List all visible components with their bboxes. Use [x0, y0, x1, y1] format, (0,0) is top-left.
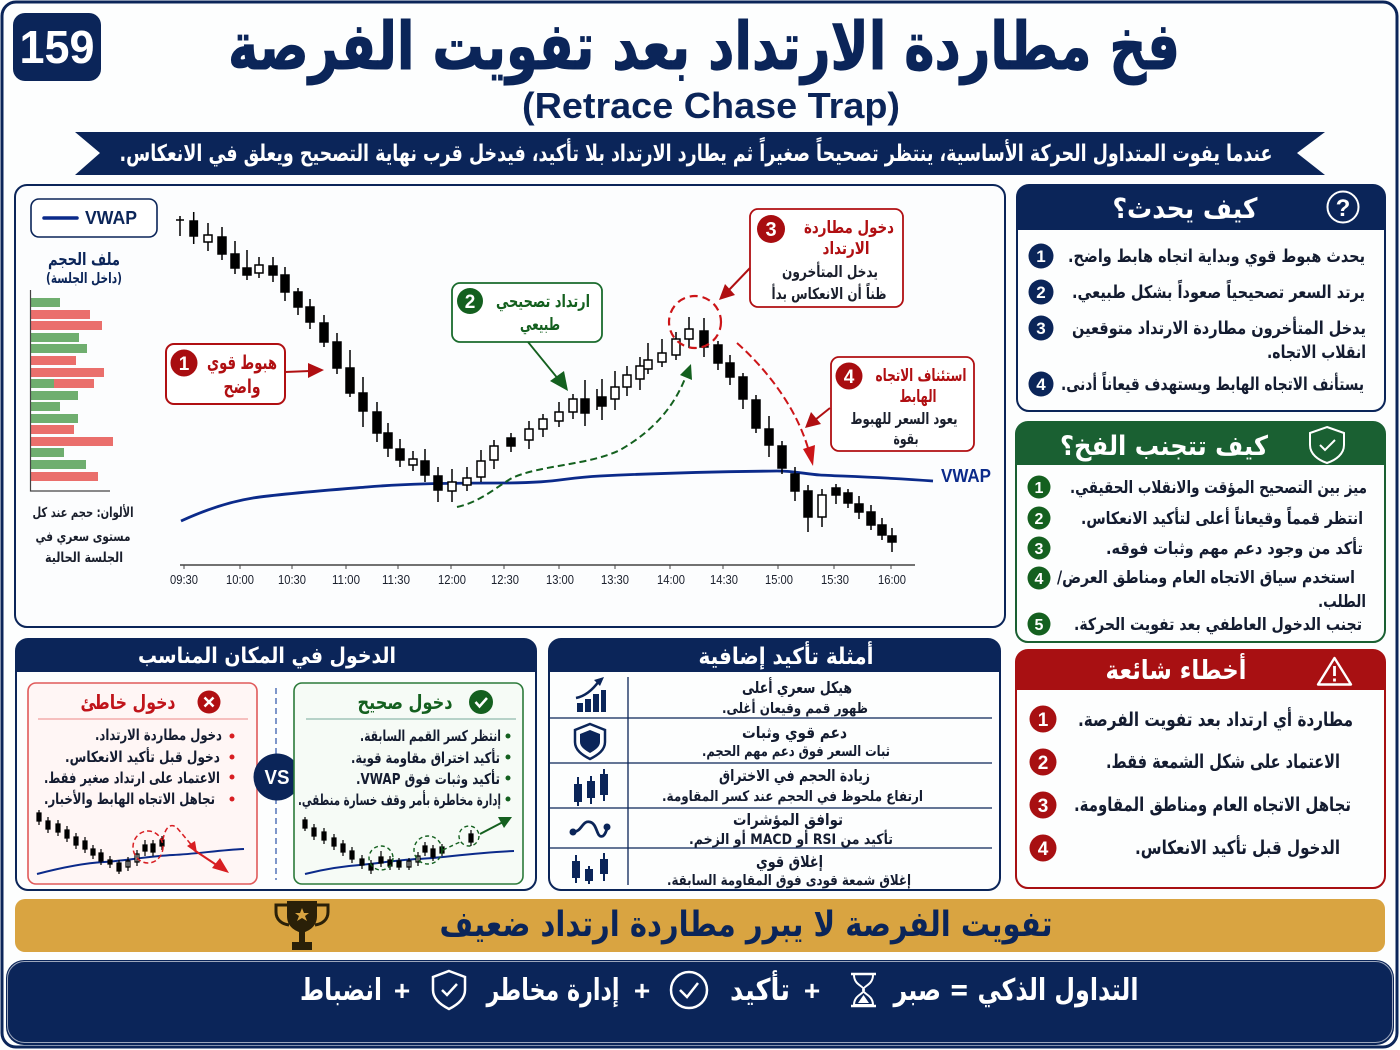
volume profile caption: مستوى سعري في	[36, 529, 130, 545]
volume profile caption: الجلسة الحالية	[45, 550, 123, 566]
red dashed resumption path	[737, 343, 815, 466]
mistakes list: 2	[1038, 753, 1048, 774]
time axis: 15:00	[765, 572, 793, 587]
panel: common mistakes	[1016, 650, 1385, 888]
summary ribbon	[75, 132, 1325, 175]
row 4: indicator agreement: تأكيد من RSI أو MACD أو الزخم.	[689, 830, 893, 848]
mistakes list: 1	[1038, 710, 1049, 731]
time axis: 10:00	[226, 572, 254, 587]
steps: الطلب.	[1318, 592, 1366, 612]
mistakes list	[1030, 706, 1353, 862]
formula: smart trading = patience: التداول الذكي = صبر	[892, 973, 1138, 1008]
callout 4: downtrend resumes: بقوة	[894, 430, 918, 448]
icon: question mark	[1328, 192, 1358, 222]
steps: تأكد من وجود دعم مهم وثبات فوقه.	[1106, 537, 1363, 559]
card: correct entry: دخول صحيح	[358, 690, 452, 714]
row 3: breakout volume	[575, 766, 923, 806]
time axis: 13:30	[601, 572, 629, 587]
callout 3: chase entry: دخول مطاردة	[804, 218, 894, 238]
row 1: higher price structure	[576, 677, 868, 717]
time axis: 12:30	[491, 572, 519, 587]
row 1: higher price structure: ظهور قمم وقيعان أغلى.	[722, 699, 868, 717]
icon: trophy	[276, 901, 328, 950]
card: correct entry: تأكيد اختراق مقاومة قوية.	[351, 748, 500, 767]
row 2: strong support: ثبات السعر فوق دعم مهم الحجم.	[702, 744, 890, 760]
takeaway text: تفويت الفرصة لا يبرر مطاردة ارتداد ضعيف	[440, 905, 1052, 945]
panel: how it happens	[1017, 185, 1385, 411]
VWAP legend	[31, 199, 157, 237]
card: correct entry: انتظر كسر القمم السابقة.	[360, 727, 501, 745]
icon: hourglass	[851, 974, 876, 1006]
heading: كيف يحدث؟	[1112, 192, 1258, 225]
plus sign: +	[804, 975, 820, 1006]
callout 1: strong drop: هبوط قوي	[207, 352, 277, 375]
time axis: 10:30	[278, 572, 306, 587]
volume profile heading: ملف الحجم	[48, 250, 120, 270]
card: correct entry: تأكيد وثبات فوق VWAP.	[356, 769, 500, 788]
episode number badge: 159	[20, 21, 94, 73]
subtitle: (Retrace Chase Trap)	[522, 85, 900, 126]
steps	[1028, 244, 1366, 396]
VS badge	[254, 754, 300, 800]
volume profile heading	[46, 250, 122, 287]
callout 4: downtrend resumes	[831, 357, 974, 451]
word: confirmation: تأكيد	[730, 970, 790, 1008]
heading: الدخول في المكان المناسب	[138, 644, 396, 669]
arrow: callout 3 to trap circle	[719, 268, 750, 300]
row 3: breakout volume: زيادة الحجم في الاختراق	[719, 766, 870, 786]
time axis: 09:30	[170, 572, 198, 587]
row 2: strong support	[575, 723, 890, 760]
steps: 2	[1036, 283, 1046, 302]
callout 3: chase entry: يدخل المتأخرون	[782, 262, 878, 281]
steps: 2	[1035, 511, 1044, 528]
steps: 1	[1036, 247, 1046, 266]
gold takeaway banner	[15, 899, 1385, 952]
callout 2: natural corrective retrace: ارتداد تصحيحي	[496, 292, 590, 312]
callout 4: downtrend resumes: 4	[844, 367, 855, 388]
time axis	[170, 565, 915, 587]
icon: warning triangle	[1318, 658, 1351, 684]
mistakes list: 3	[1038, 796, 1048, 817]
callout 1: strong drop: 1	[179, 354, 190, 375]
callout 2: natural corrective retrace	[452, 283, 602, 342]
card: wrong entry: الاعتماد على ارتداد صغير فقط.	[44, 769, 220, 787]
row 5: strong close: إغلاق شمعة قودى فوق المقاومة السابقة.	[667, 873, 911, 889]
smart trading formula band	[6, 960, 1394, 1045]
row 5: strong close	[573, 852, 911, 889]
card: correct entry	[294, 683, 523, 884]
row 3: breakout volume: ارتفاع ملحوظ في الحجم عند كسر المقاومة.	[662, 789, 923, 805]
card: wrong entry: دخول مطاردة الارتداد.	[95, 726, 222, 744]
heading: كيف تتجنب الفخ؟	[1060, 431, 1268, 462]
callout 1: strong drop: واضح	[224, 376, 260, 398]
arrow: callout 4 to path	[805, 408, 830, 428]
time axis: 11:30	[382, 572, 410, 587]
VS badge: VS	[264, 767, 290, 789]
plus sign: +	[394, 975, 410, 1006]
candlesticks	[176, 212, 896, 552]
panel: entering at the right place	[16, 639, 536, 890]
divider line	[275, 688, 277, 880]
time axis: 11:00	[332, 572, 360, 587]
time axis: 15:30	[821, 572, 849, 587]
heading: أخطاء شائعة	[1106, 653, 1246, 686]
green dashed retrace path	[457, 364, 692, 507]
callout 4: downtrend resumes: استئناف الاتجاه	[876, 366, 966, 386]
callout 3: chase entry	[750, 209, 903, 307]
heading: أمثلة تأكيد إضافية	[698, 640, 874, 670]
icon: shield check	[1310, 427, 1344, 463]
panel: extra confirmation examples	[549, 639, 1000, 890]
icon: shield	[433, 971, 465, 1009]
red dashed trap circle	[669, 296, 721, 348]
row 2: strong support: دعم قوي وثبات	[742, 723, 847, 743]
card: wrong entry: دخول خاطئ	[80, 690, 176, 714]
callout 3: chase entry: 3	[765, 219, 777, 241]
plus sign: +	[634, 975, 650, 1006]
steps: انقلاب الاتجاه.	[1267, 343, 1366, 363]
row 1: higher price structure: هيكل سعري أعلى	[742, 677, 852, 698]
callout 4: downtrend resumes: الهابط	[900, 387, 936, 407]
panel: price chart	[15, 185, 1005, 627]
volume profile caption	[32, 504, 134, 566]
steps: 4	[1035, 571, 1044, 588]
icon: question mark: ?	[1336, 195, 1350, 222]
volume profile caption: الألوان: حجم عند كل	[32, 504, 134, 521]
mistakes list: 4	[1038, 839, 1049, 860]
word: risk management: إدارة مخاطر	[485, 973, 620, 1008]
arrow: callout 2 to retrace	[528, 342, 568, 391]
time axis: 14:00	[657, 572, 685, 587]
volume profile bars	[30, 290, 113, 491]
callout 2: natural corrective retrace: طبيعي	[520, 315, 560, 335]
time axis: 16:00	[878, 572, 906, 587]
VWAP legend: VWAP	[85, 208, 137, 228]
icon: check circle	[671, 972, 707, 1008]
row 4: indicator agreement	[570, 810, 893, 848]
time axis: 13:00	[546, 572, 574, 587]
callout 1: strong drop	[166, 344, 285, 404]
VWAP line: VWAP	[941, 466, 991, 486]
time axis: 14:30	[710, 572, 738, 587]
VWAP line	[181, 466, 991, 521]
callout 3: chase entry: الارتداد	[822, 239, 870, 259]
card: correct entry: إدارة مخاطرة بأمر وقف خسارة منطقي.	[298, 790, 501, 809]
callout 3: chase entry: ظناً أن الانعكاس بدأ	[772, 283, 886, 303]
row 5: strong close: إغلاق قوي	[756, 852, 823, 872]
volume profile heading: (داخل الجلسة)	[46, 271, 122, 287]
card: wrong entry	[28, 683, 257, 884]
arrow: callout 1 to drop	[285, 363, 324, 378]
steps: 5	[1035, 617, 1044, 634]
steps: 1	[1035, 480, 1044, 497]
steps: 4	[1036, 375, 1046, 394]
callout 2: natural corrective retrace: 2	[465, 292, 475, 313]
mini chart: correct entry	[303, 817, 514, 874]
steps: 3	[1035, 541, 1044, 558]
steps	[1028, 476, 1367, 636]
row 4: indicator agreement: توافق المؤشرات	[733, 810, 843, 829]
steps: 3	[1036, 319, 1046, 338]
panel: how to avoid the trap	[1016, 422, 1385, 642]
card: wrong entry: تجاهل الاتجاه الهابط والأخبار.	[44, 790, 215, 808]
time axis: 12:00	[438, 572, 466, 587]
word: discipline: انضباط	[300, 973, 382, 1008]
mistakes list: الدخول قبل تأكيد الانعكاس.	[1135, 835, 1340, 859]
card: wrong entry: دخول قبل تأكيد الانعكاس.	[65, 747, 220, 766]
callout 4: downtrend resumes: يعود السعر للهبوط	[850, 410, 958, 428]
mini chart: wrong entry	[37, 810, 244, 874]
episode number badge	[13, 13, 101, 81]
